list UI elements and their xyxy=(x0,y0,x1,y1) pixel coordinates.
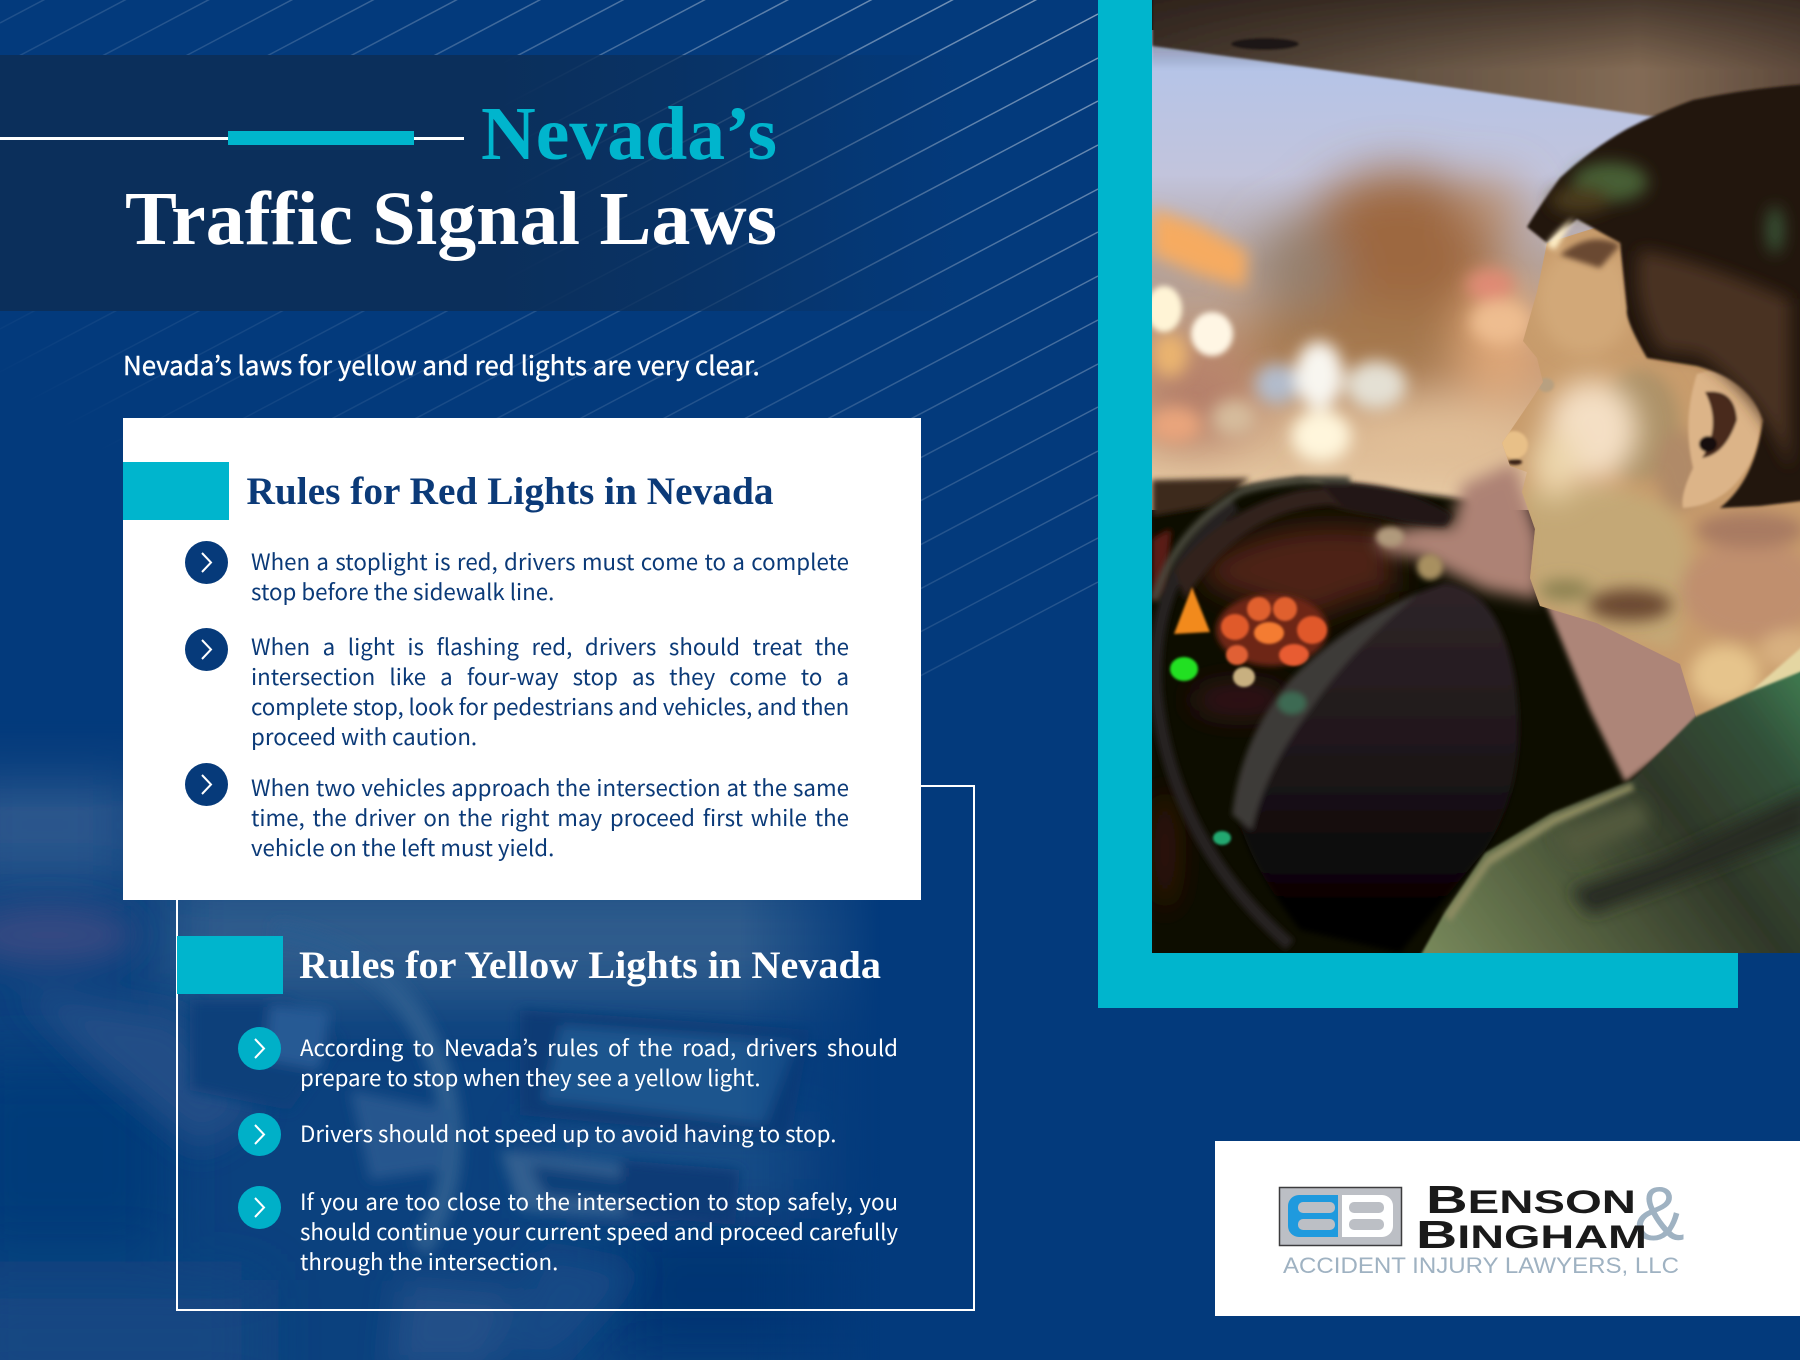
yellow text 2: Drivers should not speed up to avoid having to stop. xyxy=(300,1117,836,1149)
ear xyxy=(1682,371,1760,508)
red text 3: When two vehicles approach the intersection at the same xyxy=(251,771,849,803)
red text 2: When a light is flashing red, drivers should treat the xyxy=(251,630,849,662)
yellow bullet 1 xyxy=(238,1027,281,1070)
logo wordmark: B INGHAM xyxy=(1416,1214,1647,1257)
panel: red lights xyxy=(122,418,921,900)
red text 2: complete stop, look for pedestrians and vehicles, and then xyxy=(251,690,849,722)
wheel hub xyxy=(1232,583,1519,953)
logo ampersand: & xyxy=(1634,1172,1685,1257)
title: Nevada’s xyxy=(481,92,777,176)
yellow text 1 xyxy=(300,1031,898,1093)
arm xyxy=(1540,590,1700,782)
red heading: Rules for Red Lights in Nevada xyxy=(246,470,773,513)
title accent line xyxy=(0,131,464,145)
shirt xyxy=(1419,668,1800,958)
red bullet 2 xyxy=(185,628,228,671)
yellow text 3: should continue your current speed and proceed carefully xyxy=(300,1215,898,1247)
hand on wheel xyxy=(1375,462,1540,600)
red text 1: When a stoplight is red, drivers must come to a complete xyxy=(251,545,849,577)
windshield sky xyxy=(1152,30,1800,510)
yellow panel frame xyxy=(176,785,974,1310)
yellow heading accent xyxy=(177,936,283,994)
logo panel xyxy=(1215,1141,1800,1316)
dark car interior base xyxy=(1152,0,1800,953)
title: Traffic Signal Laws xyxy=(125,177,777,261)
hair xyxy=(1527,84,1800,508)
background photo: blurred car interior tinted blue xyxy=(0,763,852,1360)
red text 2 xyxy=(251,630,849,752)
photo: driver at night xyxy=(1152,0,1800,953)
gauges xyxy=(1216,594,1328,666)
collar xyxy=(1735,640,1800,705)
yellow text 3: through the intersection. xyxy=(300,1245,558,1277)
neck and face xyxy=(1502,228,1800,718)
red text 1 xyxy=(251,545,849,607)
red text 2: intersection like a four-way stop as they come to a xyxy=(251,660,849,692)
diagonal line pattern xyxy=(0,0,1098,676)
logo wordmark: B ENSON xyxy=(1426,1179,1636,1222)
yellow text 3 xyxy=(300,1185,898,1277)
yellow text 1: According to Nevada’s rules of the road, drivers should xyxy=(300,1031,898,1063)
dashboard and steering wheel xyxy=(1152,478,1720,960)
yellow heading: Rules for Yellow Lights in Nevada xyxy=(299,944,881,987)
red heading accent xyxy=(122,462,229,520)
yellow text 1: prepare to stop when they see a yellow light. xyxy=(300,1061,761,1093)
logo wordmark xyxy=(1416,1179,1647,1257)
photo teal frame xyxy=(1098,0,1738,1008)
title band xyxy=(0,55,1000,311)
intro text: Nevada’s laws for yellow and red lights are very clear. xyxy=(123,346,760,383)
red text 1: stop before the sidewalk line. xyxy=(251,575,554,607)
title xyxy=(125,92,777,261)
yellow bullet 3 xyxy=(238,1186,281,1229)
red text 2: proceed with caution. xyxy=(251,720,477,752)
red bullet 1 xyxy=(185,541,228,584)
red bullet 3 xyxy=(185,763,228,806)
red text 3: time, the driver on the right may proceed first while the xyxy=(251,801,849,833)
yellow bullet 2 xyxy=(238,1113,281,1156)
red text 3 xyxy=(251,771,849,863)
yellow text 3: If you are too close to the intersection to stop safely, you xyxy=(300,1185,898,1217)
red text 3: vehicle on the left must yield. xyxy=(251,831,554,863)
icon: BB monogram xyxy=(1280,1188,1402,1246)
car ceiling xyxy=(1152,0,1800,130)
logo tagline: ACCIDENT INJURY LAWYERS, LLC xyxy=(1283,1253,1679,1278)
